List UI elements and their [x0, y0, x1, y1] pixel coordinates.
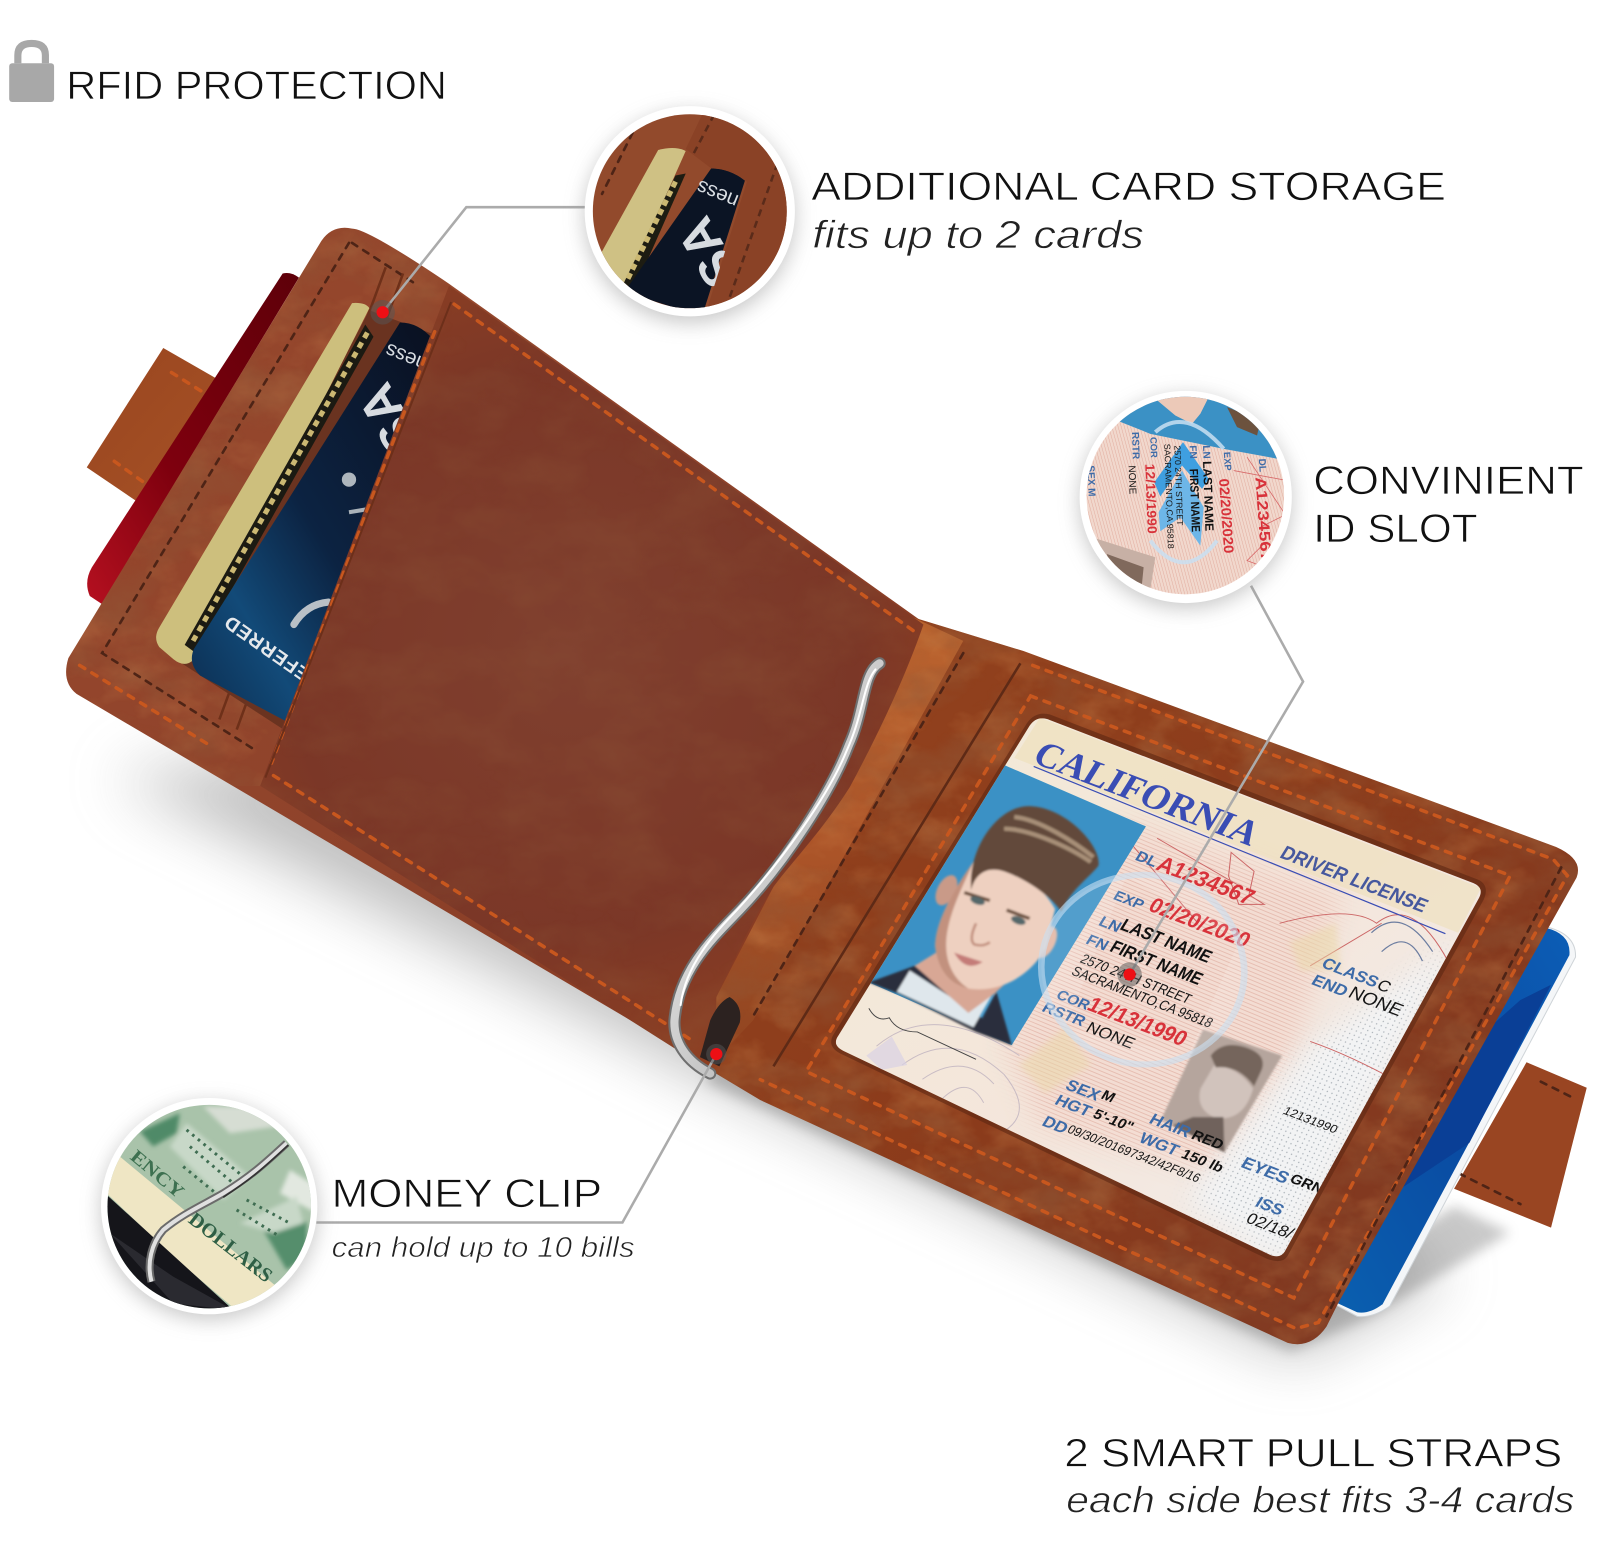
ID window with California license [820, 706, 1494, 1273]
ID window with California license: DRIVER LICENSE [1276, 842, 1432, 917]
ID window with California license: 02/18/ [1243, 1209, 1297, 1242]
icon: padlock [9, 40, 54, 102]
callout circle: id slot: EXP [1222, 452, 1233, 471]
chevron arrows [1154, 442, 1209, 497]
right pull strap [1454, 1062, 1587, 1228]
ID window with California license: COR [1053, 988, 1093, 1013]
ID window with California license: 5'-10" [1090, 1107, 1136, 1135]
ID window with California license: 150 lb [1178, 1147, 1226, 1176]
callout circle: id slot: NONE [1126, 465, 1138, 495]
ID window with California license: DL [1132, 849, 1161, 871]
ID window with California license: SEX [1062, 1076, 1105, 1105]
wallet left panel [66, 228, 919, 1022]
label: convinient id slot [1313, 459, 1584, 551]
label: additional card storage: ADDITIONAL CARD STORAGE [811, 165, 1446, 209]
ID window with California license: FIRST NAME [1107, 937, 1207, 988]
callout circle: id slot: SEX M [1085, 465, 1097, 497]
ID window with California license: RED [1188, 1128, 1227, 1153]
callout circle: additional card storage [582, 102, 806, 339]
label: additional card storage [811, 165, 1446, 257]
navy card: PREFERRED [220, 610, 338, 702]
ID window with California license: HGT [1052, 1091, 1096, 1120]
card brand text: ness [382, 338, 430, 375]
icon: money clip [674, 663, 880, 1073]
navy card [192, 322, 456, 727]
ID window with California license: FN [1083, 932, 1111, 954]
navy card: VISA [347, 374, 456, 506]
hologram ring [1041, 875, 1244, 1064]
ID window with California license: LN [1095, 914, 1124, 936]
ID window with California license: GRN [1287, 1172, 1326, 1197]
contour lines [877, 1025, 1019, 1131]
label: money clip: can hold up to 10 bills [332, 1232, 635, 1264]
callout circle: money clip: ENCY [126, 1146, 188, 1203]
callout circle: additional card storage: VISA [666, 208, 775, 339]
gold card [156, 303, 373, 664]
dark card [624, 168, 745, 316]
state outline and map lines [1127, 838, 1448, 1084]
left pull strap [87, 348, 218, 502]
pink guilloche area [997, 815, 1347, 1174]
marker: card storage [370, 300, 395, 325]
label: additional card storage: fits up to 2 cards [812, 214, 1144, 257]
callout circle: id slot: 02/20/2020 [1216, 478, 1237, 554]
callout circle: money clip: DOLLARS [184, 1208, 277, 1287]
label: convinient id slot: CONVINIENT [1313, 459, 1584, 503]
callout circle: id slot: 12/13/1990 [1142, 463, 1160, 534]
callout circle: id slot: LN [1200, 445, 1211, 459]
heading: rfid protection: RFID PROTECTION [66, 64, 447, 108]
label: money clip [332, 1172, 635, 1264]
label: smart pull straps: 2 SMART PULL STRAPS [1064, 1431, 1562, 1475]
ID window with California license: RSTR [1039, 1000, 1089, 1030]
callout circle: id slot: FN [1187, 445, 1198, 459]
ID window with California license: HAIR [1146, 1110, 1195, 1141]
portrait [869, 806, 1099, 1045]
ID window with California license: 12/13/1990 [1083, 992, 1193, 1050]
ID window with California license: SACRAMENTO,CA 95818 [1068, 964, 1216, 1031]
leather pocket edge [688, 115, 787, 307]
blue card right side [1331, 927, 1576, 1317]
ID window with California license: 02/20/2020 [1144, 893, 1256, 952]
leader line: money clip [316, 1054, 716, 1222]
ID window with California license: END [1308, 971, 1352, 1000]
ID window with California license: DD [1039, 1113, 1072, 1137]
ghost portrait [1161, 1030, 1282, 1152]
callout circle: additional card storage: ness [693, 175, 742, 212]
marker: money clip [706, 1044, 727, 1064]
ID window with California license: C [1373, 976, 1395, 996]
bill engraving [183, 1130, 290, 1237]
gold card [600, 148, 686, 293]
card pocket shadow [182, 310, 435, 730]
ID window with California license: WGT [1136, 1129, 1184, 1160]
ID window with California license: 2570 24TH STREET [1077, 952, 1194, 1007]
front flap pocket [255, 276, 939, 1082]
callout circle: id slot [1080, 390, 1294, 608]
callout circle: id slot: A1234567 [1251, 476, 1274, 562]
callout circle: id slot: DL [1256, 458, 1268, 472]
ID window with California license: M [1098, 1088, 1118, 1106]
ID window with California license: EYES [1238, 1153, 1293, 1187]
ID window with California license: NONE [1345, 982, 1407, 1020]
red card behind wallet [87, 273, 299, 604]
callout circle: id slot: COR [1148, 437, 1159, 458]
photo background [869, 765, 1146, 1045]
ID window with California license: 12131990 [1281, 1104, 1341, 1136]
signature [869, 1008, 976, 1059]
wallet spine and right panel [704, 612, 1592, 1357]
wallet ground shadow [112, 755, 1510, 1357]
leader line: id slot [1130, 586, 1303, 975]
marker: id slot [1117, 962, 1142, 987]
ID window with California license: CLASS [1318, 954, 1382, 991]
label: money clip: MONEY CLIP [332, 1172, 602, 1216]
ID window with California license: ISS [1252, 1193, 1288, 1219]
dotted security area [1181, 942, 1451, 1256]
callout circle: money clip [101, 1098, 317, 1319]
callout circle: id slot: SACRAMENTO,CA 95818 [1162, 444, 1176, 549]
ID window with California license: 09/30/201697342/42F8/16 [1065, 1122, 1203, 1185]
ID window with California license: LAST NAME [1117, 915, 1216, 966]
ID window with California license: NONE [1083, 1019, 1139, 1052]
callout circle: id slot: RSTR [1129, 432, 1141, 460]
leader line: additional card storage [383, 207, 587, 312]
callout circle: id slot: LAST NAME [1200, 461, 1216, 531]
callout circle: id slot: FIRST NAME [1187, 468, 1203, 532]
label: smart pull straps [1064, 1431, 1574, 1520]
bright spine band [714, 617, 963, 1061]
label: smart pull straps: each side best fits 3-4 cards [1066, 1479, 1574, 1520]
ID window with California license: A1234567 [1151, 852, 1259, 910]
label: convinient id slot: ID SLOT [1313, 507, 1478, 551]
ID window with California license: EXP [1110, 889, 1147, 913]
callout circle: id slot: 2570 24TH STREET [1172, 445, 1185, 526]
license text: CALIFORNIA [1026, 734, 1267, 854]
top tan band [1014, 718, 1481, 933]
